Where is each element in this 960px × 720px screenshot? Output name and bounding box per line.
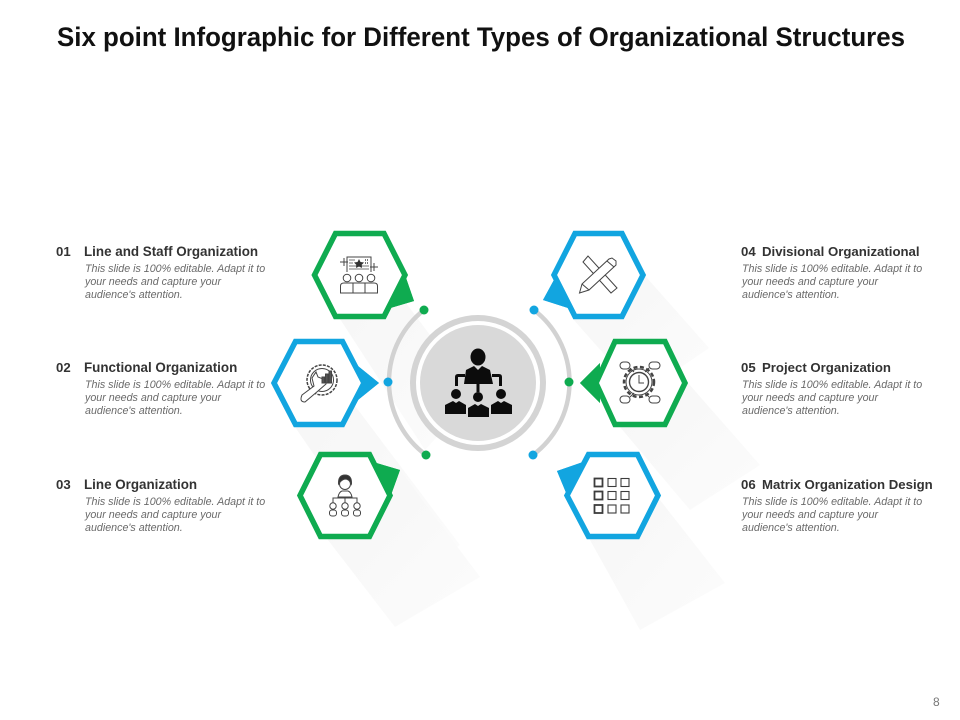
text block 01: 01 bbox=[56, 244, 71, 259]
text block 04: Divisional Organizational bbox=[762, 244, 920, 259]
text block 03: Line Organization bbox=[84, 477, 197, 492]
hexagon 03: line organization bbox=[300, 454, 400, 536]
hexagon 04: divisional bbox=[543, 234, 643, 316]
text block 05: your needs and capture your bbox=[741, 392, 878, 404]
text block 06: audience's attention. bbox=[742, 522, 840, 534]
text block 06: 06 bbox=[741, 477, 756, 492]
connector dots bbox=[384, 306, 574, 460]
hexagon 05: project bbox=[580, 342, 685, 424]
text block 03: your needs and capture your bbox=[84, 509, 221, 521]
center circle with org chart icon bbox=[413, 318, 543, 448]
text block 02: audience's attention. bbox=[85, 405, 183, 417]
text block 02: Functional Organization bbox=[84, 360, 237, 375]
text block 06: This slide is 100% editable. Adapt it to bbox=[742, 496, 922, 508]
text block 04: your needs and capture your bbox=[741, 276, 878, 288]
icon: pencil and ruler bbox=[580, 256, 617, 293]
icon: matrix grid bbox=[594, 478, 629, 513]
text block 01: audience's attention. bbox=[85, 289, 183, 301]
text block 01: your needs and capture your bbox=[84, 276, 221, 288]
icon: gear clock bbox=[620, 362, 660, 403]
text block 03 bbox=[56, 477, 265, 534]
text block 02 bbox=[56, 360, 265, 417]
text block 02: your needs and capture your bbox=[84, 392, 221, 404]
hexagon 02: functional bbox=[274, 342, 379, 424]
long shadows behind hexagons bbox=[295, 270, 760, 630]
text block 03: 03 bbox=[56, 477, 71, 492]
icon: team and board bbox=[340, 257, 378, 293]
text block 03: audience's attention. bbox=[85, 522, 183, 534]
text block 04: audience's attention. bbox=[742, 289, 840, 301]
text block 05: Project Organization bbox=[762, 360, 891, 375]
text block 03: This slide is 100% editable. Adapt it to bbox=[85, 496, 265, 508]
hexagon 01: line and staff bbox=[314, 234, 414, 316]
text block 02: This slide is 100% editable. Adapt it to bbox=[85, 379, 265, 391]
title: Six point Infographic for Different Types of Organizational Structures bbox=[57, 22, 905, 52]
text block 06: your needs and capture your bbox=[741, 509, 878, 521]
hexagon 06: matrix bbox=[557, 454, 658, 536]
icon: gear wrench chart bbox=[301, 365, 337, 402]
icon: manager and team bbox=[330, 475, 360, 516]
text block 04: This slide is 100% editable. Adapt it to bbox=[742, 263, 922, 275]
connector arcs bbox=[389, 310, 570, 455]
text block 01: This slide is 100% editable. Adapt it to bbox=[85, 263, 265, 275]
page number: 8 bbox=[933, 695, 940, 709]
text block 01 bbox=[56, 244, 265, 301]
text block 01: Line and Staff Organization bbox=[84, 244, 258, 259]
text block 05: This slide is 100% editable. Adapt it to bbox=[742, 379, 922, 391]
text block 05: 05 bbox=[741, 360, 756, 375]
text block 06 bbox=[741, 477, 933, 534]
text block 05 bbox=[741, 360, 922, 417]
text block 04: 04 bbox=[741, 244, 756, 259]
icon: organization hierarchy bbox=[445, 348, 512, 417]
text block 05: audience's attention. bbox=[742, 405, 840, 417]
text block 06: Matrix Organization Design bbox=[762, 477, 933, 492]
text block 02: 02 bbox=[56, 360, 71, 375]
text block 04 bbox=[741, 244, 922, 301]
